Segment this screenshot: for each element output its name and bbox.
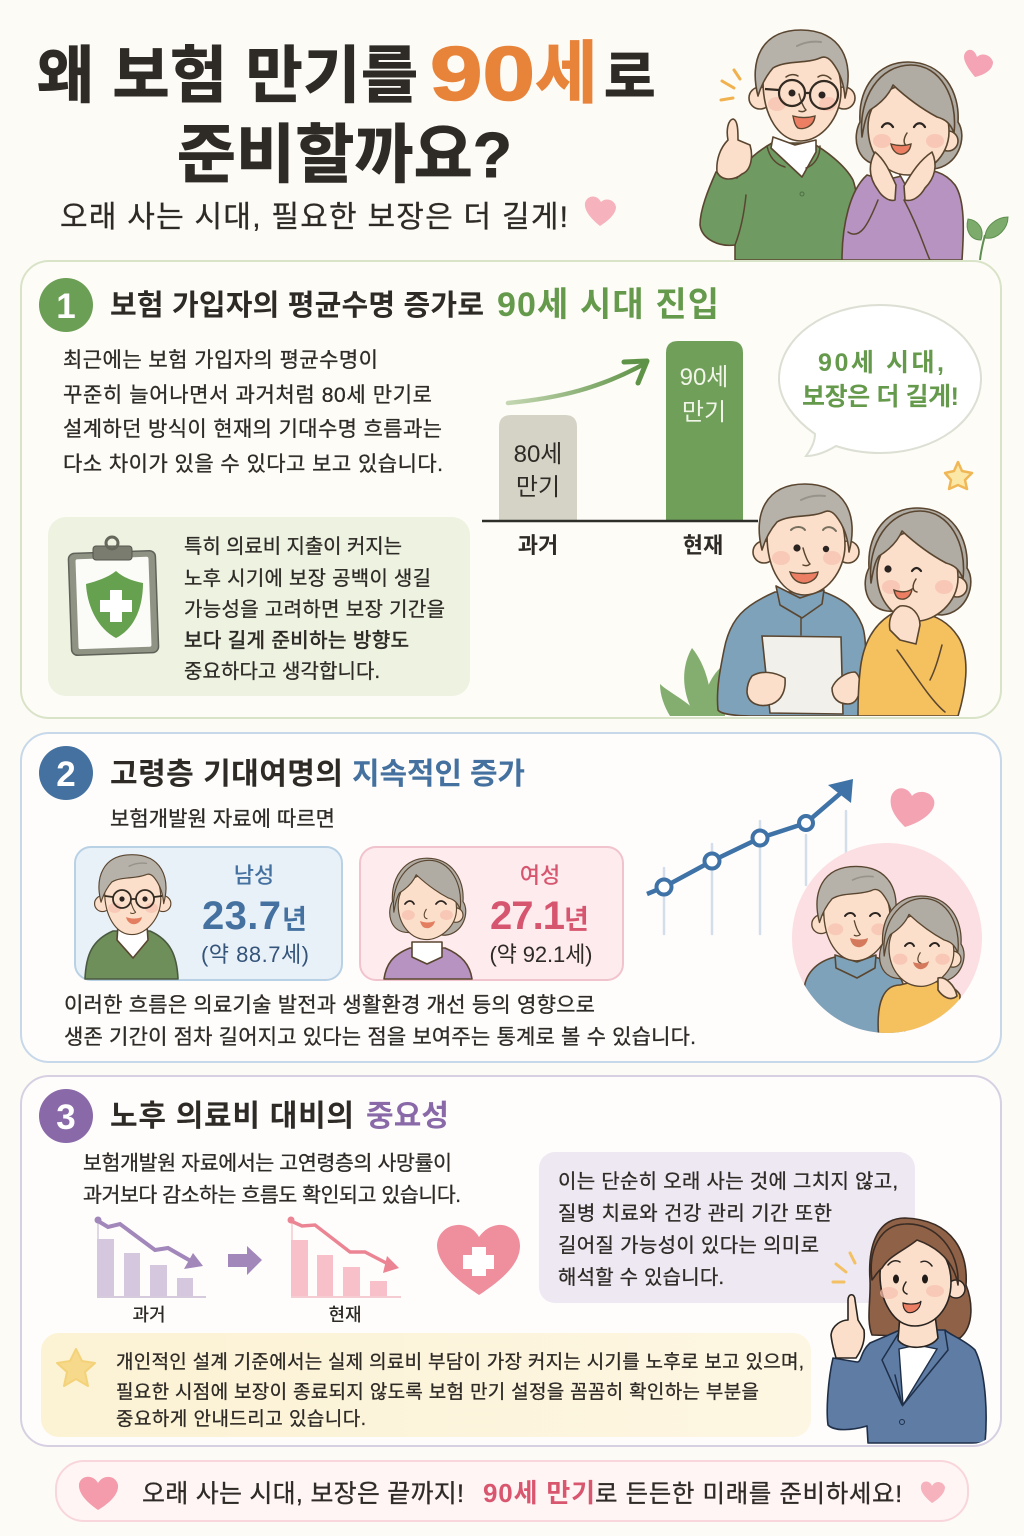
- bar chart: 80 to 90: 90세: [680, 364, 728, 391]
- source line: 보험개발원 자료에 따르면: [110, 808, 335, 831]
- speech bubble: [779, 305, 981, 456]
- body text: [64, 994, 696, 1049]
- callout: meaning: 이는 단순히 오래 사는 것에 그치지 않고,: [558, 1170, 898, 1193]
- callout: care period: 가능성을 고려하면 보장 기간을: [184, 598, 445, 621]
- callout: yellow note: 중요하게 안내드리고 있습니다.: [116, 1408, 366, 1430]
- speech bubble: 90세 시대,: [818, 349, 944, 377]
- icon: right heart: [921, 1482, 945, 1503]
- body text: 꾸준히 늘어나면서 과거처럼 80세 만기로: [63, 384, 432, 407]
- card: female: 년: [564, 905, 589, 935]
- number badge 3: [39, 1089, 93, 1143]
- heading 2: 고령층 기대여명의: [110, 758, 343, 791]
- icon: star: [57, 1349, 95, 1386]
- banner: closing message: 로 든든한 미래를 준비하세요!: [595, 1480, 902, 1508]
- callout: yellow note: 필요한 시점에 보장이 종료되지 않도록 보험 만기 설정을 꼼꼼히 확인하는 부분을: [116, 1381, 759, 1403]
- icon: star: [945, 462, 972, 489]
- banner: closing message: [56, 1461, 968, 1521]
- arrow: rising: [508, 361, 647, 403]
- subtitle: 오래 사는 시대, 필요한 보장은 더 길게!: [60, 201, 568, 234]
- card: female: 여성: [520, 863, 560, 888]
- title: 90: [430, 32, 535, 117]
- icon: heart with plus: [437, 1225, 520, 1295]
- body text: 과거보다 감소하는 흐름도 확인되고 있습니다.: [83, 1184, 461, 1207]
- body text: [83, 1152, 461, 1207]
- heading 3: 노후 의료비 대비의: [110, 1100, 354, 1133]
- body text: 설계하던 방식이 현재의 기대수명 흐름과는: [63, 418, 442, 441]
- banner: closing message: 오래 사는 시대, 보장은 끝까지!: [142, 1480, 464, 1508]
- bar chart: 80 to 90: 현재: [683, 533, 723, 558]
- panel: section 3: [21, 1076, 1001, 1446]
- card: male: 23.7: [202, 894, 281, 938]
- title: 로: [604, 46, 656, 109]
- heading 1: 90세 시대 진입: [497, 286, 719, 324]
- illustration: happy senior couple: [700, 30, 963, 260]
- icon: sprout: [967, 217, 1008, 260]
- icon: heart: [891, 788, 934, 827]
- bar chart: 80 to 90: [482, 341, 758, 558]
- number badge 2: [39, 746, 93, 800]
- number badge 3: 3: [56, 1098, 76, 1137]
- bar chart: 80 to 90: 과거: [518, 533, 558, 558]
- number badge 1: [39, 278, 93, 332]
- male portrait: [85, 855, 178, 979]
- card: male: 년: [282, 905, 307, 935]
- card: female: [360, 847, 623, 980]
- panel: section 1: [21, 261, 1001, 718]
- icon: subtitle heart: [585, 196, 616, 226]
- body text: 보험개발원 자료에서는 고연령층의 사망률이: [83, 1152, 452, 1175]
- callout: meaning: 질병 치료와 건강 관리 기간 또한: [558, 1202, 832, 1225]
- bar chart: 80 to 90: 만기: [516, 474, 560, 501]
- chart: past decline: [94, 1216, 206, 1325]
- number badge 2: 2: [56, 755, 76, 794]
- body text: 생존 기간이 점차 길어지고 있다는 점을 보여주는 통계로 볼 수 있습니다.: [64, 1026, 696, 1049]
- card: male: 남성: [234, 863, 274, 888]
- icon: pink heart: [964, 50, 993, 77]
- card: male: (약 88.7세): [201, 942, 309, 967]
- female portrait: [384, 858, 472, 979]
- callout: care period: 특히 의료비 지출이 커지는: [184, 535, 402, 558]
- callout: care period: 보다 길게 준비하는 방향도: [184, 629, 409, 652]
- card: female: (약 92.1세): [490, 942, 592, 967]
- callout: meaning: 길어질 가능성이 있다는 의미로: [558, 1234, 819, 1257]
- title: 세: [535, 36, 598, 112]
- speech bubble: 보장은 더 길게!: [802, 383, 959, 411]
- line chart: rising arrow: [647, 779, 853, 934]
- title: 준비할까요?: [177, 119, 512, 191]
- banner: closing message: 90세 만기: [483, 1478, 595, 1508]
- chart: present decline: [288, 1216, 401, 1325]
- callout: yellow note: 개인적인 설계 기준에서는 실제 의료비 부담이 가장 커지는 시기를 노후로 보고 있으며,: [116, 1351, 804, 1373]
- callout: meaning: [539, 1152, 915, 1303]
- number badge 1: 1: [56, 287, 76, 326]
- illustration: couple in circle: [792, 843, 982, 1040]
- callout: yellow note: [41, 1333, 811, 1437]
- card: female: 27.1: [490, 894, 565, 938]
- illustration: pointing consultant: [827, 1218, 986, 1443]
- callout: care period: 중요하다고 생각합니다.: [184, 660, 380, 683]
- sparkle lines: [833, 1253, 855, 1282]
- heading 1: 보험 가입자의 평균수명 증가로: [110, 289, 484, 322]
- body text: 최근에는 보험 가입자의 평균수명이: [63, 349, 378, 372]
- heading 1: [110, 286, 719, 324]
- body text: 다소 차이가 있을 수 있다고 보고 있습니다.: [63, 453, 443, 476]
- bar chart: 80 to 90: 80세: [514, 441, 562, 468]
- callout: care period: 노후 시기에 보장 공백이 생길: [184, 567, 431, 590]
- card: male: [75, 847, 342, 980]
- heading 3: 중요성: [366, 1100, 449, 1133]
- illustration: couple reading document: [660, 484, 971, 716]
- title: [37, 32, 656, 191]
- body text: 이러한 흐름은 의료기술 발전과 생활환경 개선 등의 영향으로: [64, 994, 595, 1017]
- icon: clipboard shield: [68, 537, 159, 655]
- chart: present decline: 현재: [328, 1305, 362, 1325]
- icon: left heart: [79, 1477, 118, 1510]
- callout: care period: [48, 517, 470, 696]
- arrow: past to present: [228, 1246, 262, 1275]
- title: 왜 보험 만기를: [37, 42, 418, 111]
- panel: section 2: [21, 733, 1001, 1062]
- body text: [63, 349, 443, 476]
- heading 2: [110, 758, 525, 791]
- chart: past decline: 과거: [132, 1305, 166, 1325]
- heading 2: 지속적인 증가: [352, 758, 525, 791]
- callout: meaning: 해석할 수 있습니다.: [558, 1266, 724, 1289]
- bar chart: 80 to 90: 만기: [682, 399, 726, 426]
